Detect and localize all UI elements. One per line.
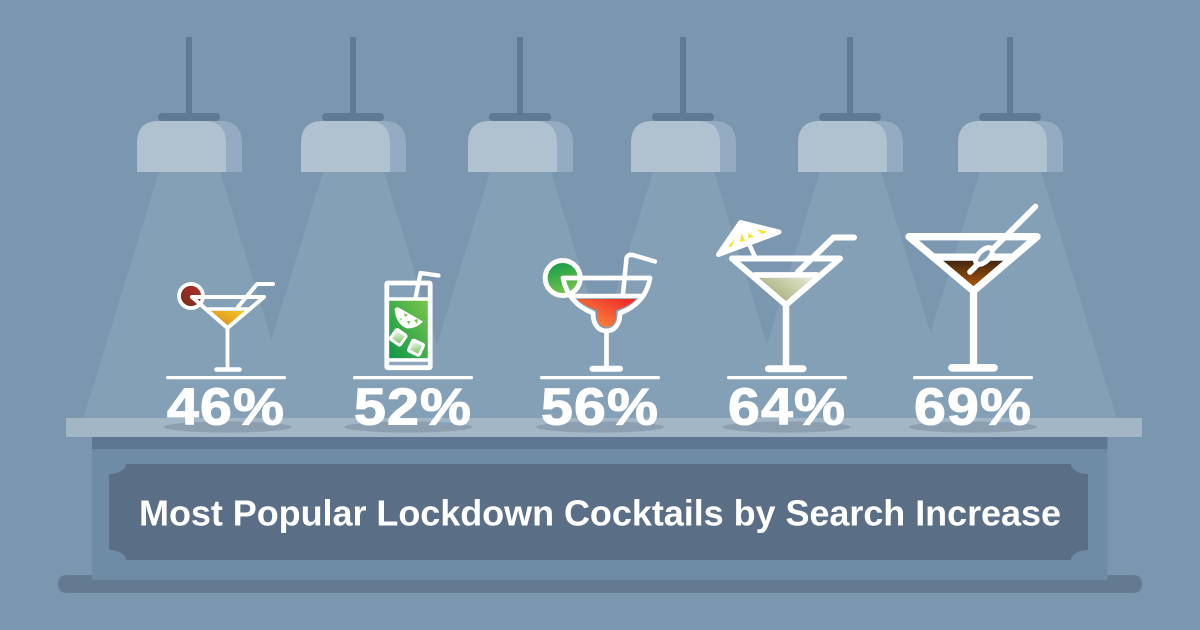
divider bbox=[727, 376, 847, 379]
lamp 2 bbox=[301, 37, 406, 172]
divider bbox=[540, 376, 660, 379]
cocktail 4: 64% bbox=[718, 222, 854, 436]
divider bbox=[166, 376, 286, 379]
umbrella bbox=[718, 222, 779, 254]
cocktail 5: 69% bbox=[909, 206, 1037, 436]
bar base bbox=[58, 575, 1142, 593]
shadow bbox=[536, 422, 664, 432]
shadow bbox=[344, 422, 472, 432]
cocktail 3: 56% bbox=[536, 255, 664, 436]
value: 56% bbox=[541, 378, 659, 436]
ice cube 1 bbox=[390, 329, 407, 346]
cocktail 1: 46% bbox=[164, 284, 292, 436]
value: 46% bbox=[167, 378, 285, 436]
divider bbox=[353, 376, 473, 379]
shadow bbox=[722, 422, 850, 432]
pendant lamps bbox=[137, 37, 1063, 172]
glass icon: margarita bbox=[545, 255, 655, 369]
divider bbox=[913, 376, 1033, 379]
lamp 6 bbox=[958, 37, 1063, 172]
light beams bbox=[84, 172, 1116, 418]
title plaque bbox=[109, 464, 1088, 560]
lamp 1 bbox=[137, 37, 242, 172]
shadow bbox=[909, 422, 1037, 432]
lamp 4 bbox=[631, 37, 736, 172]
lamp 3 bbox=[468, 37, 573, 172]
glass icon: umbrella martini bbox=[718, 222, 854, 369]
glass icon: olive martini bbox=[909, 206, 1037, 368]
bar cabinet shadow band bbox=[92, 437, 1108, 449]
cocktail 2: 52% bbox=[344, 273, 473, 436]
value: 69% bbox=[914, 378, 1032, 436]
glass icon: highball bbox=[387, 273, 438, 368]
bar counter top bbox=[66, 418, 1142, 437]
ice cube 2 bbox=[408, 340, 424, 356]
shadow bbox=[164, 422, 292, 432]
title: Most Popular Lockdown Cocktails by Search Increase bbox=[139, 492, 1061, 534]
lamp 5 bbox=[798, 37, 903, 172]
lime wedge bbox=[394, 307, 423, 328]
value: 64% bbox=[728, 378, 846, 436]
glass icon: cherry martini bbox=[179, 284, 273, 370]
bar cabinet bbox=[92, 437, 1108, 580]
value: 52% bbox=[354, 378, 472, 436]
